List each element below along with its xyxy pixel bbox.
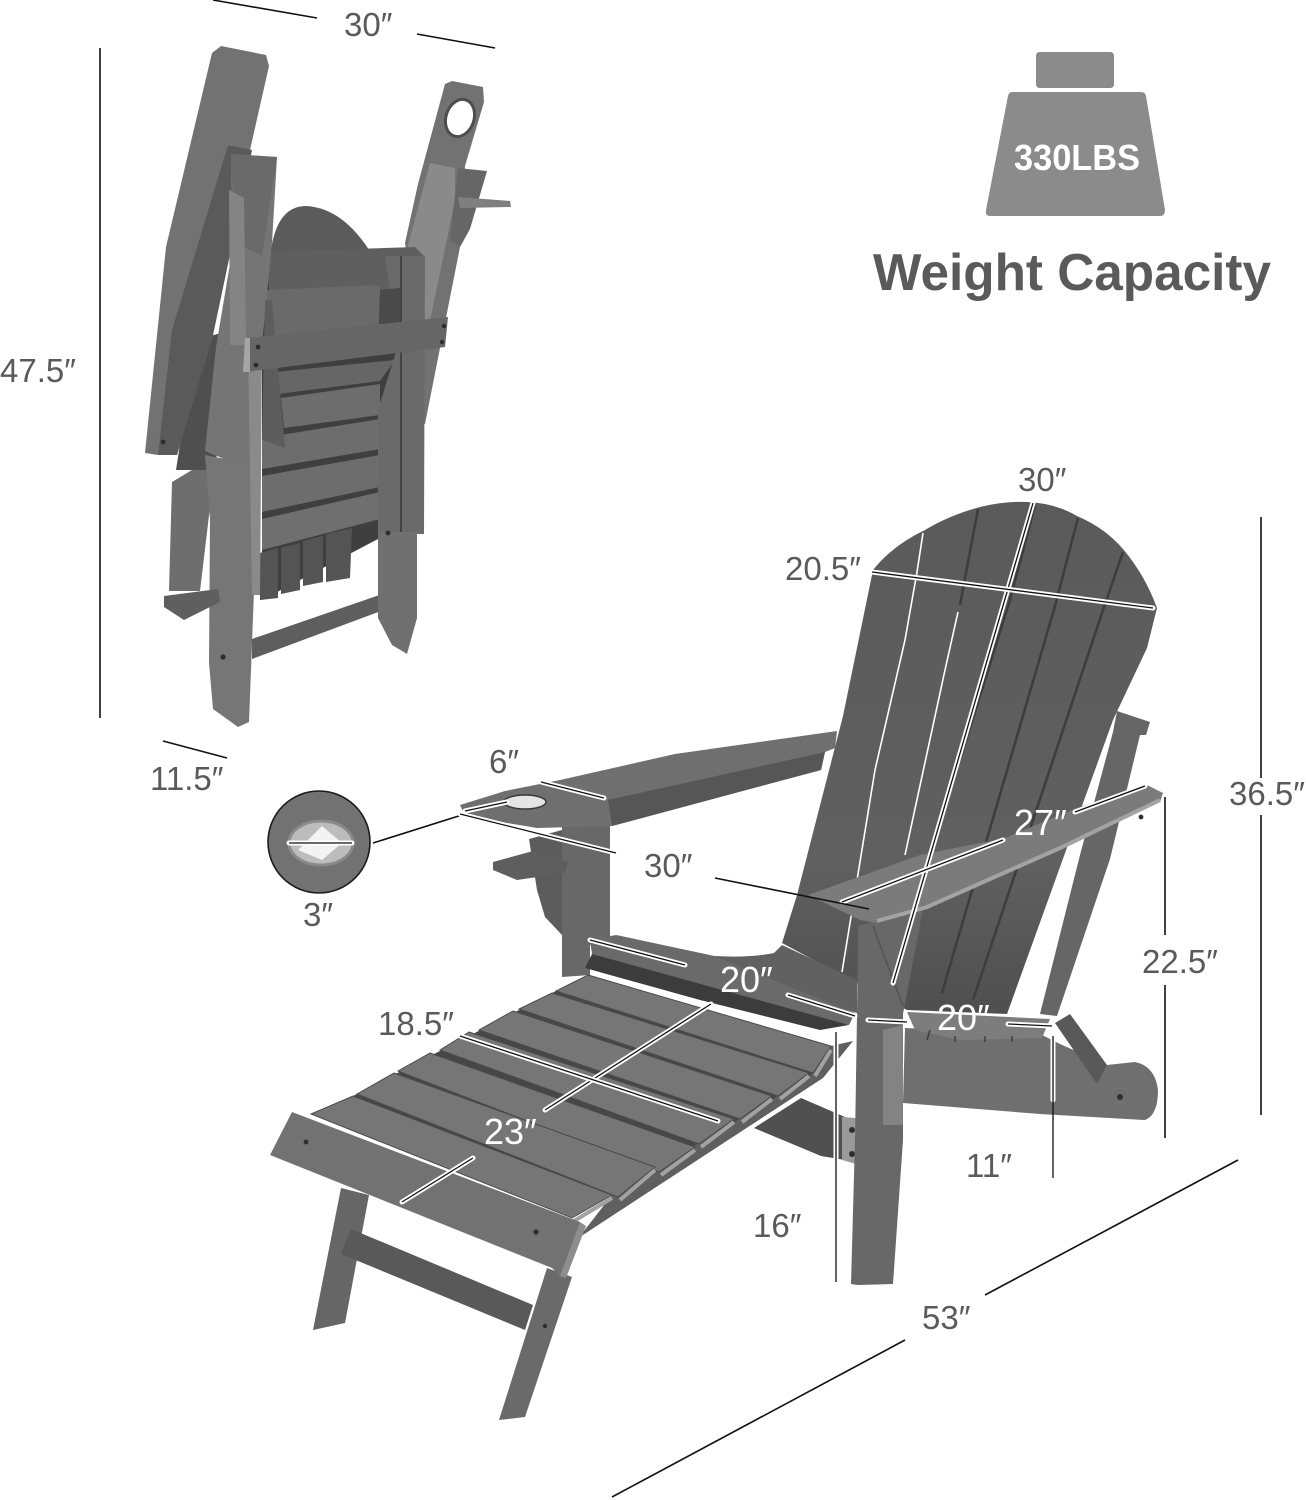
inset hole opening [298, 826, 342, 860]
folded chair: top bars [266, 247, 424, 300]
folded chair: backrest fan top [270, 206, 374, 258]
label: 53: 53″ [922, 1299, 971, 1336]
main chair: right armrest [808, 785, 1163, 923]
dim: arm width 6 [541, 782, 604, 798]
folded chair: far rear leg [169, 465, 215, 591]
main chair: seat shadow [585, 954, 849, 1030]
icon: weight body [986, 92, 1165, 216]
ottoman crossbar [341, 1229, 533, 1330]
label: 23: 23″ [484, 1111, 537, 1152]
folded chair: lower fan ends [260, 528, 352, 600]
main chair: right armrest edge [877, 800, 1160, 921]
folded chair: cup hole [441, 96, 479, 140]
folded chair: arm support beam [158, 145, 252, 455]
folded chair: right rail shadow [400, 256, 402, 534]
folded chair: slat 4 [262, 455, 380, 512]
folded chair: hinge hardware [378, 288, 400, 345]
main chair: seat slat gaps [927, 1030, 1012, 1042]
main chair: seat slats behind [616, 935, 857, 1013]
dim: folded height 47.5 [99, 48, 101, 718]
folded chair: rail bright hinge [229, 190, 246, 345]
dim: seat depth 20 [590, 940, 855, 1016]
folded chair: upper slats [265, 285, 380, 340]
folded chair: front post [205, 154, 277, 470]
label: 30 back: 30″ [1018, 461, 1067, 498]
folded chair: bolts [161, 324, 446, 660]
label: 6: 6″ [489, 743, 519, 780]
main chair: rear leg [1040, 711, 1150, 1016]
dim: total height 36.5 [1260, 517, 1262, 1115]
dim: rail height 11 [1050, 1036, 1056, 1178]
folded chair: foot bracket [164, 589, 220, 620]
dim: cup hole leader [373, 802, 507, 843]
main chair: leg hinge highlight [883, 1025, 903, 1125]
label: 18.5: 18.5″ [378, 1005, 454, 1042]
folded chair: inner post strip [248, 345, 262, 595]
dim: arm span 30 [460, 814, 869, 909]
label: 22.5: 22.5″ [1142, 943, 1218, 980]
main chair photo [270, 502, 1163, 1420]
main chair: front right leg inner edge [873, 926, 903, 1006]
ottoman slats [311, 975, 831, 1221]
folded chair: backrest underside panel [145, 46, 269, 455]
dim: ottoman width 18.5 [460, 1036, 718, 1121]
folded chair: slat 2 [281, 384, 380, 428]
inset circle [268, 791, 370, 893]
main chair: armrest bolt [1117, 815, 1143, 1100]
ottoman bolts [304, 1140, 547, 1328]
label: 30 folded: 30″ [344, 6, 393, 43]
inset measure line [289, 840, 352, 846]
folded chair: cup holder [450, 168, 487, 247]
cup hole inset [268, 791, 370, 893]
main chair: rear brace [1055, 1014, 1107, 1084]
dim: folded depth 11.5 [163, 741, 227, 758]
folded chair: left rail [205, 455, 254, 727]
dim: back width 20.5 [872, 572, 1153, 608]
weight value: 330LBS [1014, 137, 1140, 178]
folded chair: slat 1 [275, 360, 395, 394]
label: 16: 16″ [753, 1207, 802, 1244]
ottoman end board [270, 1112, 580, 1278]
folded chair: crossbar [245, 317, 448, 372]
dim: arm length 27 [842, 786, 1145, 902]
label: 20.5: 20.5″ [785, 550, 861, 587]
main chair: plate bolts [849, 1127, 855, 1157]
ottoman underside [566, 1041, 853, 1246]
icon: weight top [1036, 52, 1114, 88]
dim: seat width 20 [868, 1020, 1052, 1026]
folded chair: slat 3 [262, 419, 380, 469]
folded chair: slat stack [262, 250, 400, 600]
main chair: left armrest [460, 731, 837, 828]
label: 30 arm: 30″ [644, 847, 693, 884]
main chair: front right leg [851, 909, 923, 1285]
label: 20 seat width: 20″ [937, 997, 990, 1038]
main chair: backrest slat gaps [842, 505, 1123, 1000]
main chair: backrest [782, 502, 1157, 1014]
dim: arm height 22.5 [1164, 797, 1166, 1138]
label: 36.5: 36.5″ [1229, 775, 1305, 812]
main chair: metal plate [842, 1117, 869, 1167]
label: 47.5: 47.5″ [0, 352, 76, 389]
dim: seat back height 30 [893, 503, 1033, 983]
heading: weight capacity: Weight Capacity [873, 244, 1271, 302]
folded chair: right arm [405, 81, 484, 424]
label: 3: 3″ [303, 896, 333, 933]
dim: ottoman length 23 [402, 1004, 711, 1202]
folded chair: right foot [378, 532, 417, 654]
folded chair: post top face [231, 154, 277, 256]
main chair: left arm underside [608, 752, 825, 826]
inset hole [289, 821, 353, 865]
ottoman end board front edge [560, 1222, 586, 1278]
folded chair: slat 5 [262, 492, 380, 550]
main chair: left arm cup hole [504, 795, 546, 809]
main chair: left front post [562, 819, 610, 977]
folded chair: small fold panel [262, 300, 285, 448]
dim: total length 53 [612, 1160, 1238, 1497]
folded chair: crossbar end [243, 338, 250, 372]
main chair: seat back slat ends [907, 1012, 1050, 1040]
folded chair: cup holder tab [458, 197, 511, 208]
folded chair photo [145, 46, 511, 727]
folded chair: right arm bracket [408, 163, 455, 345]
dim: folded width 30 [213, 0, 495, 48]
main chair: cup holder tray [493, 851, 568, 880]
folded chair: shadow behind post [176, 330, 232, 470]
folded chair: right rails [378, 256, 425, 534]
ottoman left leg [313, 1188, 369, 1330]
main chair: rear cup support [529, 830, 562, 935]
weight capacity badge [873, 52, 1271, 302]
label: 27: 27″ [1014, 802, 1067, 843]
main chair: support bar [754, 1098, 845, 1160]
main chair: seat front plank [590, 935, 855, 1025]
folded chair: cross rod [252, 589, 397, 659]
dim: leg height 16 [834, 1032, 838, 1282]
ottoman right leg [499, 1268, 572, 1420]
label: 20 seat depth: 20″ [720, 959, 773, 1000]
main chair: rear foot rail [903, 1028, 1158, 1120]
label: 11.5: 11.5″ [150, 760, 224, 797]
ottoman slat underlay [311, 975, 831, 1218]
label: 11: 11″ [966, 1147, 1012, 1184]
